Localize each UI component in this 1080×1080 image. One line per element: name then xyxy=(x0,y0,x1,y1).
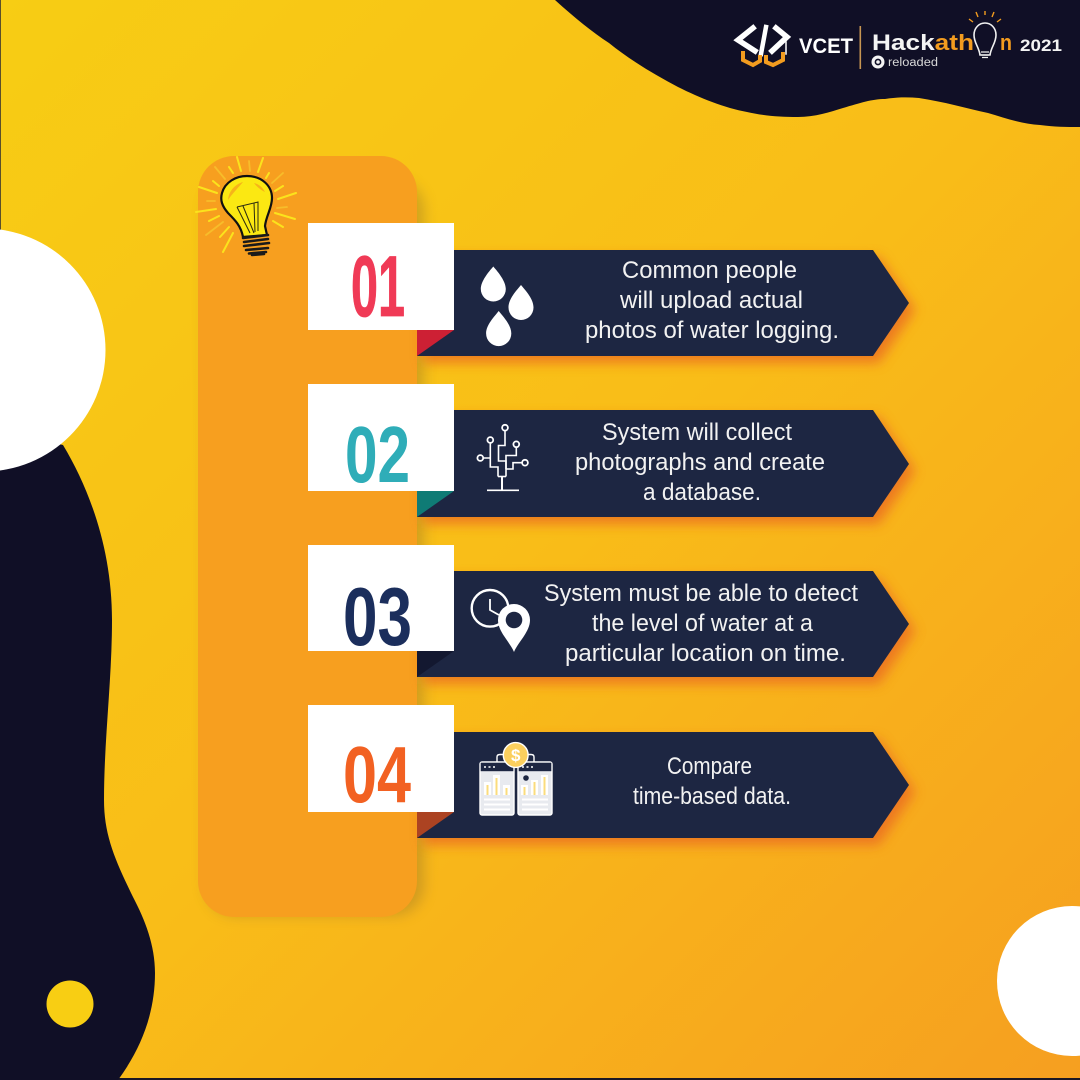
left navy blob xyxy=(0,430,155,1080)
white circle left xyxy=(0,228,106,472)
right dashboard xyxy=(518,762,552,815)
bulb rays xyxy=(196,157,296,252)
step 2 xyxy=(308,384,915,524)
step 3 xyxy=(308,545,915,684)
arrow banner 3 xyxy=(417,571,909,677)
left edge line xyxy=(0,0,1,230)
bulb filament xyxy=(237,202,258,233)
text: n: n xyxy=(1000,30,1012,55)
number 01: 01 xyxy=(351,239,405,335)
white circle bottom right xyxy=(997,906,1080,1056)
text 2: photographs and create xyxy=(575,449,825,476)
icon: water drops xyxy=(481,266,534,346)
panel shadow xyxy=(206,180,424,915)
bulb glass xyxy=(221,176,272,237)
text 3: the level of water at a xyxy=(592,610,814,637)
text: reloaded: reloaded xyxy=(888,57,938,69)
arrow shadow 1 xyxy=(423,257,915,363)
number box 1 xyxy=(308,223,454,330)
text 1 xyxy=(585,257,839,344)
icon: light bulb xyxy=(196,157,296,255)
text 4: Compare xyxy=(667,753,752,780)
step 1 xyxy=(308,223,915,363)
fold 1 xyxy=(417,330,454,356)
text 2: a database. xyxy=(643,479,761,506)
number box 3 xyxy=(308,545,454,651)
top right navy blob xyxy=(555,0,1080,127)
arrow banner 1 xyxy=(417,250,909,356)
number box 4 xyxy=(308,705,454,812)
step 4 xyxy=(308,705,915,845)
text 4 xyxy=(633,753,791,810)
text 3: System must be able to detect xyxy=(544,580,858,607)
yellow dot xyxy=(46,980,94,1028)
text 3 xyxy=(544,580,858,667)
arrow shadow 2 xyxy=(423,417,915,524)
arrow banner 4 xyxy=(417,732,909,838)
number 02: 02 xyxy=(345,410,410,499)
arrow shadow 4 xyxy=(423,739,915,845)
icon: comparison dashboards xyxy=(480,743,552,815)
dollar coin: $ xyxy=(511,746,521,765)
orange panel xyxy=(198,156,417,917)
text 3: particular location on time. xyxy=(565,640,846,667)
text 4: time-based data. xyxy=(633,783,791,810)
number 03: 03 xyxy=(343,570,412,663)
number box 2 xyxy=(308,384,454,491)
bulb base xyxy=(243,235,269,255)
number 04: 04 xyxy=(343,730,411,819)
text 2: System will collect xyxy=(602,419,792,446)
icon: VCET cap xyxy=(738,27,787,65)
icon: clock and location pin xyxy=(472,590,530,652)
fold 4 xyxy=(417,812,454,838)
text 2 xyxy=(575,419,825,506)
arrow banner 2 xyxy=(417,410,909,517)
fold 2 xyxy=(417,491,454,517)
text 1: Common people xyxy=(622,257,797,284)
icon: logo bulb xyxy=(969,11,1001,58)
bottom edge line xyxy=(118,1078,1080,1080)
icon: reloaded mark xyxy=(872,56,884,68)
text 1: will upload actual xyxy=(619,287,803,314)
fold 3 xyxy=(417,651,454,677)
arrow shadow 3 xyxy=(423,578,915,684)
left dashboard xyxy=(480,762,514,815)
text: 2021: 2021 xyxy=(1020,36,1062,55)
logo: VCET Hackathon 2021 xyxy=(738,11,1062,69)
icon: circuit tree xyxy=(477,425,528,490)
divider xyxy=(860,26,861,69)
text: Hackathon: Hack ath xyxy=(872,30,974,55)
text 1: photos of water logging. xyxy=(585,317,839,344)
bulb highlight xyxy=(228,182,265,200)
text: VCET: VCET xyxy=(799,35,853,58)
